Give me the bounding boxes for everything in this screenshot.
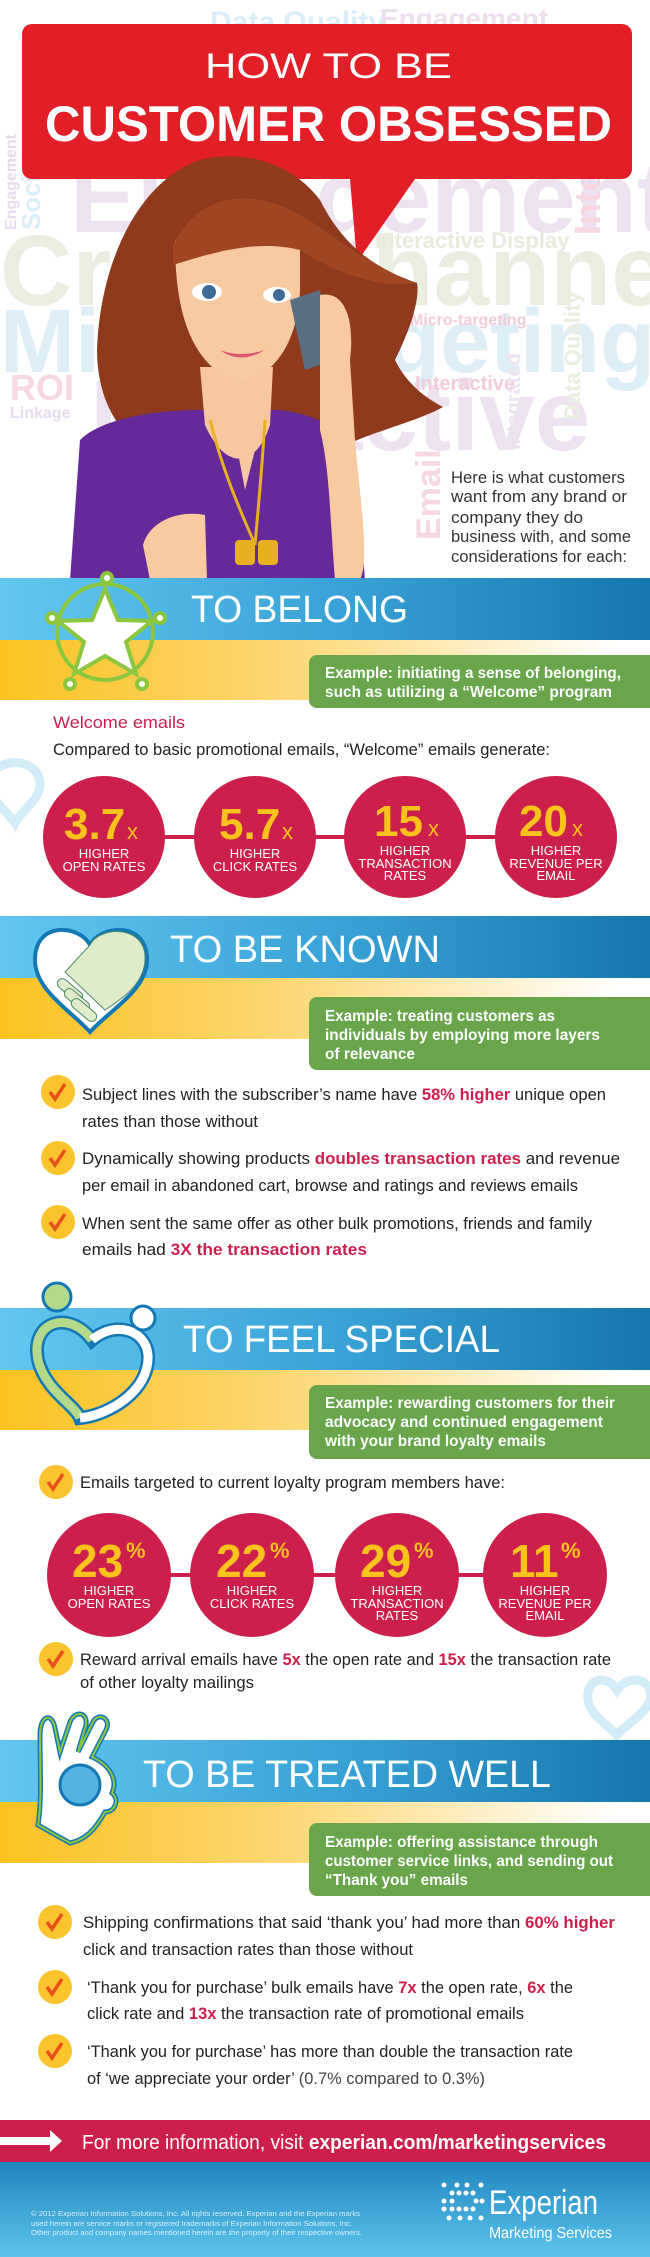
bullet: reward arrival: of other loyalty mailings bbox=[80, 1673, 254, 1692]
bullet 3 bbox=[41, 1205, 592, 1259]
stat circles: x bbox=[572, 816, 583, 841]
intro text: Here is what customers bbox=[451, 468, 625, 487]
heading: TO BE TREATED WELL bbox=[143, 1754, 551, 1796]
footer: more information bar bbox=[0, 2120, 650, 2162]
stat circles: 5.7 bbox=[219, 800, 280, 849]
section: to be known bbox=[0, 916, 650, 1259]
stat circles: CLICK RATES bbox=[213, 859, 297, 874]
example box: Example: rewarding customers for their bbox=[325, 1395, 615, 1412]
stat circles: % bbox=[561, 1538, 581, 1563]
stat circles: 29 bbox=[360, 1535, 411, 1587]
stat circles: HIGHER bbox=[230, 846, 280, 861]
footer: copyright and logo bbox=[0, 2162, 650, 2257]
background word cloud: Email bbox=[410, 449, 448, 540]
stat circles: TRANSACTION bbox=[358, 856, 452, 871]
example box: such as utilizing a “Welcome” program bbox=[325, 684, 612, 701]
background word cloud: ROI bbox=[10, 367, 74, 408]
stat circles bbox=[43, 776, 617, 898]
example box: Example: treating customers as bbox=[325, 1008, 555, 1025]
example box bbox=[309, 655, 650, 708]
stat circles: EMAIL bbox=[525, 1608, 565, 1623]
bullet 1: Subject lines with the subscriber’s name have 58% higher unique open bbox=[82, 1085, 606, 1104]
example box: “Thank you” emails bbox=[325, 1872, 468, 1889]
copyright text: used herein are service marks or registered trademarks of Experian Information Solutions, Inc. bbox=[31, 2219, 352, 2228]
background word cloud: Integrated bbox=[503, 353, 525, 450]
bullet 2: ‘Thank you for purchase’ bulk emails have 7x the open rate, 6x the bbox=[87, 1978, 573, 1997]
speech bubble title bbox=[22, 24, 632, 262]
heading: TO BE KNOWN bbox=[170, 929, 440, 971]
example box: of relevance bbox=[325, 1046, 415, 1063]
background word cloud: Data Quality bbox=[560, 291, 585, 420]
example box: individuals by employing more layers bbox=[325, 1027, 600, 1044]
footer: more information bar: For more information, visit experian.com/marketingservices bbox=[82, 2132, 606, 2154]
example box: Example: offering assistance through bbox=[325, 1834, 598, 1851]
background word cloud: Integrated bbox=[567, 61, 608, 235]
intro line: Compared to basic promotional emails, “Welcome” emails generate: bbox=[53, 740, 550, 759]
example box bbox=[309, 1823, 650, 1896]
intro text: business with, and some bbox=[451, 527, 631, 546]
intro text bbox=[450, 468, 631, 566]
arrow bbox=[0, 2130, 62, 2152]
example box: advocacy and continued engagement bbox=[325, 1414, 604, 1431]
stat circles: HIGHER bbox=[372, 1583, 422, 1598]
stat circles: % bbox=[126, 1538, 146, 1563]
stat circles: 3.7 bbox=[64, 800, 125, 849]
background word cloud: Interactive bbox=[90, 360, 590, 472]
stat circles: 22 bbox=[216, 1535, 267, 1587]
subheading: Welcome emails bbox=[53, 713, 185, 732]
stat circles: REVENUE PER bbox=[509, 856, 603, 871]
heading: TO FEEL SPECIAL bbox=[183, 1319, 500, 1361]
icon: ok hand bbox=[38, 1714, 116, 1843]
stat circles: RATES bbox=[384, 868, 427, 883]
icon: heart with people bbox=[37, 1283, 155, 1418]
stat circles bbox=[47, 1513, 607, 1637]
title line 2: CUSTOMER OBSESSED bbox=[45, 96, 612, 152]
bullet 3: ‘Thank you for purchase’ has more than double the transaction rate bbox=[87, 2042, 573, 2061]
copyright text bbox=[31, 2209, 362, 2237]
icon: faint heart right bbox=[588, 1680, 650, 1735]
bullet 2 bbox=[41, 1141, 620, 1195]
copyright text: © 2012 Experian Information Solutions, Inc. All rights reserved. Experian and the Experian marks bbox=[31, 2209, 360, 2218]
stat circles: 20 bbox=[519, 797, 568, 846]
background word cloud: Interactive bbox=[415, 373, 515, 395]
intro text: want from any brand or bbox=[450, 487, 627, 506]
stat circles: 15 bbox=[374, 797, 423, 846]
stat circles: HIGHER bbox=[79, 846, 129, 861]
stat circles: REVENUE PER bbox=[498, 1596, 592, 1611]
bullet 1 bbox=[41, 1075, 606, 1131]
stat circles: CLICK RATES bbox=[210, 1596, 294, 1611]
background word cloud: Micro-targeting bbox=[0, 292, 650, 392]
stat circles: HIGHER bbox=[227, 1583, 277, 1598]
bullet: loyalty members bbox=[39, 1465, 505, 1499]
intro text: considerations for each: bbox=[451, 547, 627, 566]
background word cloud: Interactive Display bbox=[375, 228, 570, 253]
section: to feel special bbox=[0, 1283, 650, 1735]
bullet 2: Dynamically showing products doubles transaction rates and revenue bbox=[82, 1149, 620, 1168]
bullet 2: per email in abandoned cart, browse and ratings and reviews emails bbox=[82, 1176, 578, 1195]
stat circles: 11 bbox=[510, 1535, 559, 1587]
illustration: woman on phone bbox=[70, 156, 443, 580]
bullet 3: When sent the same offer as other bulk promotions, friends and family bbox=[82, 1214, 592, 1233]
stat circles: HIGHER bbox=[531, 843, 581, 858]
example box: with your brand loyalty emails bbox=[324, 1433, 546, 1450]
stat circles: HIGHER bbox=[520, 1583, 570, 1598]
bullet 1: click and transaction rates than those without bbox=[83, 1940, 413, 1959]
background word cloud: Micro-targeting bbox=[410, 312, 526, 329]
bullet 1: Shipping confirmations that said ‘thank you’ had more than 60% higher bbox=[83, 1913, 615, 1932]
experian logo bbox=[442, 2182, 612, 2242]
example box: Example: initiating a sense of belonging, bbox=[325, 665, 621, 682]
stat circles: x bbox=[282, 819, 293, 844]
title line 1: HOW TO BE bbox=[205, 47, 452, 86]
stat circles: RATES bbox=[376, 1608, 419, 1623]
icon: faint heart bbox=[0, 763, 40, 823]
stat circles: OPEN RATES bbox=[68, 1596, 151, 1611]
stat circles: % bbox=[414, 1538, 434, 1563]
section: to be treated well bbox=[0, 1714, 650, 2088]
stat circles: TRANSACTION bbox=[350, 1596, 444, 1611]
stat circles: % bbox=[270, 1538, 290, 1563]
bullet 1 bbox=[38, 1905, 615, 1959]
heading: TO BELONG bbox=[191, 589, 408, 631]
background word cloud: Data Quality bbox=[210, 6, 385, 39]
bullet: reward arrival bbox=[39, 1642, 611, 1692]
copyright text: Other product and company names mentioned herein are the property of their respective owners. bbox=[31, 2228, 362, 2237]
stat circles: OPEN RATES bbox=[63, 859, 146, 874]
bullet 2: click rate and 13x the transaction rate of promotional emails bbox=[87, 2004, 524, 2023]
example box: customer service links, and sending out bbox=[325, 1853, 614, 1870]
stat circles: 23 bbox=[72, 1535, 123, 1587]
stat circles: EMAIL bbox=[536, 868, 576, 883]
icon: handshake heart bbox=[35, 930, 147, 1032]
example box bbox=[309, 1385, 650, 1459]
stat circles: x bbox=[127, 819, 138, 844]
example box bbox=[309, 997, 650, 1070]
stat circles: HIGHER bbox=[380, 843, 430, 858]
experian logo: Marketing Services bbox=[489, 2225, 612, 2242]
background word cloud: Linkage bbox=[10, 405, 71, 422]
background word cloud: Engagement bbox=[3, 133, 20, 230]
bullet 3: of ‘we appreciate your order’ (0.7% compared to 0.3%) bbox=[87, 2069, 485, 2088]
bullet 3: emails had 3X the transaction rates bbox=[82, 1240, 367, 1259]
bullet 2 bbox=[38, 1970, 573, 2023]
background word cloud bbox=[0, 3, 650, 540]
icon: star of people bbox=[47, 573, 165, 689]
stat circles: HIGHER bbox=[84, 1583, 134, 1598]
bullet: loyalty members: Emails targeted to current loyalty program members have: bbox=[80, 1473, 505, 1492]
bullet 3 bbox=[38, 2034, 573, 2088]
experian logo: Experian bbox=[489, 2184, 598, 2222]
bullet: reward arrival: Reward arrival emails have 5x the open rate and 15x the transaction rate bbox=[80, 1650, 611, 1669]
background word cloud: Engagement bbox=[380, 3, 548, 34]
stat circles: x bbox=[428, 816, 439, 841]
section: to belong bbox=[0, 573, 650, 898]
background word cloud: Social bbox=[16, 153, 46, 230]
bullet 1: rates than those without bbox=[82, 1112, 258, 1131]
intro text: company they do bbox=[451, 508, 583, 527]
